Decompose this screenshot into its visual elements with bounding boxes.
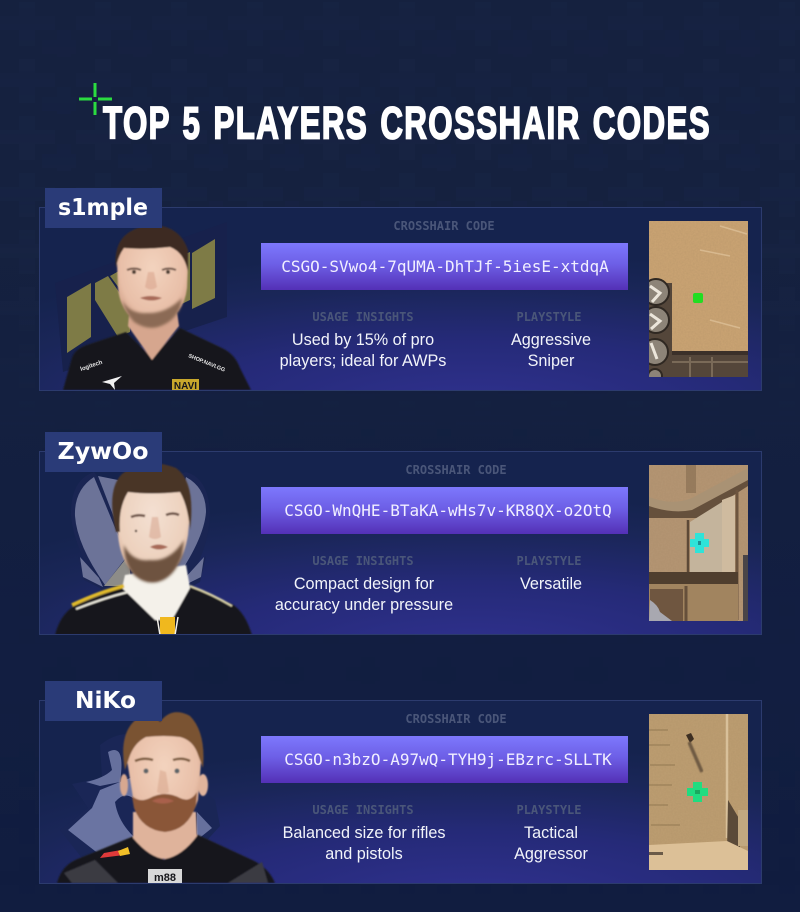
card background [40, 452, 762, 634]
panel: ZywOo [40, 432, 762, 635]
usage insights: USAGE INSIGHTS [312, 554, 414, 568]
player portrait: ZywOo [55, 463, 252, 635]
usage insights: Compact design for [294, 575, 435, 593]
usage insights: accuracy under pressure [275, 596, 453, 614]
screenshot: ZywOo crosshair [649, 465, 748, 621]
player portrait: NiKo [57, 712, 275, 884]
code button [261, 736, 628, 783]
name tab: s1mple [45, 188, 162, 228]
playstyle [514, 803, 588, 863]
playstyle: Tactical [524, 824, 578, 842]
usage insights: and pistols [325, 845, 403, 863]
playstyle: PLAYSTYLE [516, 310, 582, 324]
code button [261, 243, 628, 290]
team logo: NAVI [55, 222, 227, 372]
playstyle [516, 554, 582, 593]
usage insights: Used by 15% of pro [292, 331, 434, 349]
crosshair code label: CROSSHAIR CODE [393, 219, 495, 233]
screenshot: NiKo crosshair [649, 714, 748, 870]
usage insights [280, 310, 446, 370]
name tab: s1mple: s1mple [58, 195, 148, 221]
playstyle: Versatile [520, 575, 582, 593]
icon: green crosshair [79, 83, 112, 115]
code button [261, 487, 628, 534]
screenshot: s1mple crosshair [649, 221, 748, 377]
team logo: Vitality [71, 472, 210, 594]
player portrait: s1mple: SHOP.NAVI.GG [187, 353, 226, 374]
name tab: NiKo [45, 681, 162, 721]
playstyle: PLAYSTYLE [516, 803, 582, 817]
crosshair code label: CROSSHAIR CODE [405, 712, 507, 726]
name tab: NiKo: NiKo [75, 688, 136, 714]
player portrait: s1mple [63, 226, 251, 392]
usage insights: USAGE INSIGHTS [312, 803, 414, 817]
playstyle: PLAYSTYLE [516, 554, 582, 568]
playstyle: Aggressive [511, 331, 591, 349]
card background [40, 700, 762, 884]
playstyle: Sniper [528, 352, 575, 370]
panel: s1mple [40, 188, 762, 392]
usage insights [275, 554, 453, 614]
usage insights [283, 803, 445, 863]
playstyle: Aggressor [514, 845, 588, 863]
name tab: ZywOo: ZywOo [58, 439, 148, 465]
player portrait: NiKo: m88 [154, 872, 176, 884]
card background [40, 208, 762, 390]
code button: CSGO-n3bzO-A97wQ-TYH9j-EBzrc-SLLTK [284, 750, 612, 769]
team logo: G2 [60, 734, 220, 862]
crosshair code label: CROSSHAIR CODE [405, 463, 507, 477]
usage insights: players; ideal for AWPs [280, 352, 446, 370]
usage insights: USAGE INSIGHTS [312, 310, 414, 324]
code button: CSGO-WnQHE-BTaKA-wHs7v-KR8QX-o2OtQ [284, 501, 612, 520]
name tab: ZywOo [45, 432, 162, 472]
panel: NiKo [40, 681, 762, 884]
code button: CSGO-SVwo4-7qUMA-DhTJf-5iesE-xtdqA [281, 257, 609, 276]
player portrait: s1mple: logitech [80, 360, 104, 373]
player portrait: s1mple: NAVI [174, 381, 197, 392]
usage insights: Balanced size for rifles [283, 824, 445, 842]
playstyle [511, 310, 591, 370]
